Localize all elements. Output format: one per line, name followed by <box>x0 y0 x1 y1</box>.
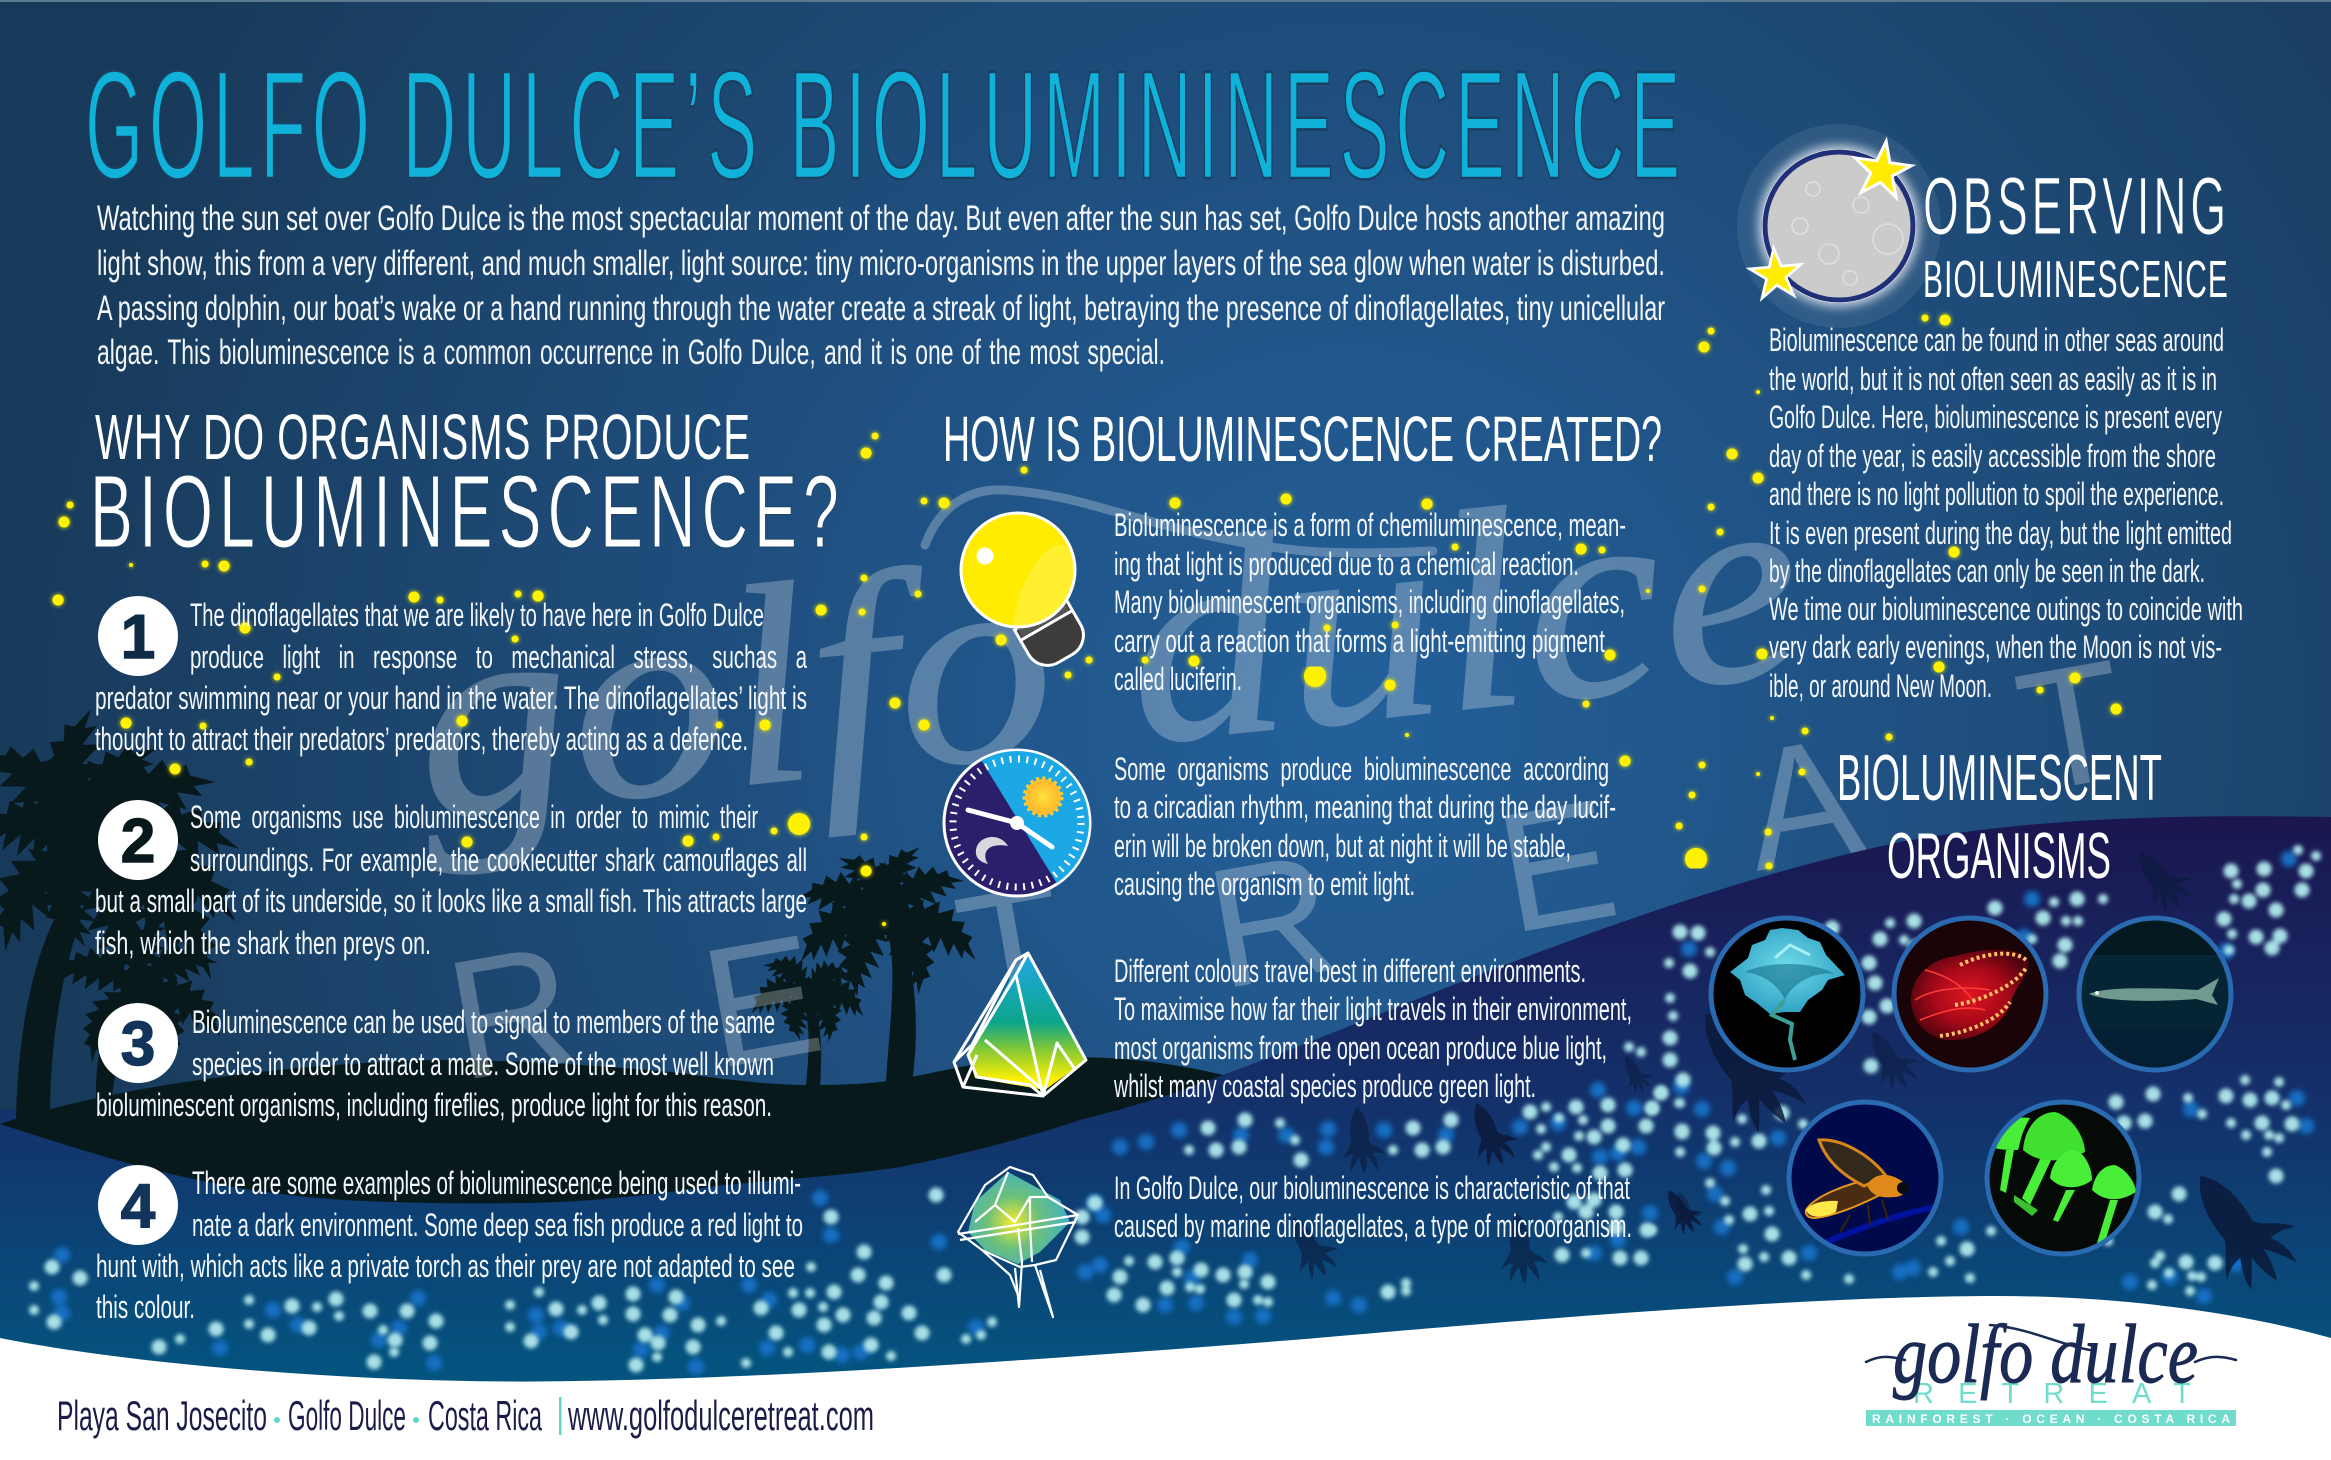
icon: clock day and night <box>942 748 1092 898</box>
first how paragraph: Bioluminescence is a form of chemiluminescence, mean- <box>1114 507 1626 543</box>
organism: firefly <box>1789 1102 1945 1255</box>
first how paragraph: carry out a reaction that forms a light-emitting pigment <box>1114 623 1605 659</box>
watermark: golfo dulce retreat: T <box>944 847 1080 1052</box>
reason 1: thought to attract their predators’ predators, thereby acting as a defence. <box>95 721 748 757</box>
organism: glowing mushrooms <box>1987 1102 2139 1254</box>
fireflies: normal <box>58 320 2116 871</box>
fourth how paragraph: In Golfo Dulce, our bioluminescence is characteristic of that <box>1114 1170 1630 1206</box>
logo: golfo dulce retreat: RAINFOREST · OCEAN · COSTA RICA <box>1872 1412 2230 1426</box>
reason 4: There are some examples of bioluminescence being used to illumi- <box>192 1165 801 1201</box>
reason 4: hunt with, which acts like a private torch as their prey are not adapted to see <box>96 1248 795 1284</box>
number badge 2: 2 <box>121 807 155 876</box>
number badge 4: 4 <box>121 1172 156 1241</box>
footer contact line: www.golfodulceretreat.com <box>567 1392 874 1439</box>
reason 1: predator swimming near or your hand in the water. The dinoflagellates’ light is <box>95 680 807 716</box>
bioluminescent water: blue bokeh <box>59 859 2306 1367</box>
reason 2: fish, which the shark then preys on. <box>95 925 431 961</box>
fireflies: tiny <box>131 392 1772 924</box>
second how paragraph <box>1114 751 1616 902</box>
third how paragraph: Different colours travel best in different environments. <box>1114 953 1586 989</box>
fourth how paragraph: caused by marine dinoflagellates, a type of microorganism. <box>1114 1208 1632 1244</box>
second how paragraph: Some organisms produce bioluminescence according <box>1114 751 1609 787</box>
fireflies: small <box>70 318 2040 866</box>
reason 2: but a small part of its underside, so it looks like a small fish. This attracts large <box>95 883 807 919</box>
watermark: golfo dulce retreat: T <box>2005 624 2140 829</box>
number badge 2 <box>98 800 178 880</box>
logo: golfo dulce retreat <box>1866 1308 2236 1426</box>
footer contact line: Playa San Josecito <box>57 1392 267 1439</box>
number badge 3 <box>98 1003 178 1083</box>
reason 2: Some organisms use bioluminescence in order to mimic their <box>190 799 758 835</box>
first how paragraph: called luciferin. <box>1114 661 1242 697</box>
second how paragraph: causing the organism to emit light. <box>1114 866 1415 902</box>
first how paragraph <box>1114 507 1626 697</box>
footer contact line <box>57 1392 874 1439</box>
intro paragraph <box>97 199 1665 372</box>
fourth how paragraph <box>1114 1170 1632 1244</box>
reason 1: The dinoflagellates that we are likely to have here in Golfo Dulce <box>190 597 764 633</box>
reason 4 <box>96 1165 803 1325</box>
logo: golfo dulce retreat: RETREAT <box>1913 1378 2191 1410</box>
second star <box>1748 246 1803 299</box>
white footer wave <box>0 1296 2331 1460</box>
reason 3 <box>96 1003 775 1123</box>
icon: light bulb <box>961 513 1091 673</box>
fireflies: large <box>799 676 1696 859</box>
second how paragraph: erin will be broken down, but at night it will be stable, <box>1114 828 1571 864</box>
observing paragraph: ible, or around New Moon. <box>1769 668 1992 704</box>
heading: how is bioluminescence created: HOW IS BIOLUMINESCENCE CREATED? <box>943 403 1662 475</box>
reason 3: Bioluminescence can be used to signal to members of the same <box>192 1004 775 1040</box>
icon: dinoflagellate <box>958 1167 1078 1317</box>
first how paragraph: Many bioluminescent organisms, including dinoflagellates, <box>1114 584 1625 620</box>
third how paragraph: most organisms from the open ocean produce blue light, <box>1114 1030 1607 1066</box>
watermark: golfo dulce retreat: R <box>435 909 589 1117</box>
squids in the water <box>1276 836 2314 1304</box>
reason 4: this colour. <box>96 1289 195 1325</box>
watermark: golfo dulce retreat: E <box>1485 763 1630 970</box>
star <box>1850 137 1914 199</box>
watermark: golfo dulce retreat: A <box>1730 700 1875 907</box>
heading: why do organisms produce bioluminescence <box>90 401 845 569</box>
island silhouette with palm trees <box>0 708 1223 1203</box>
heading: why do organisms produce bioluminescence: BIOLUMINESCENCE? <box>90 454 845 569</box>
watermark: golfo dulce retreat <box>428 485 2112 1078</box>
number badge 3: 3 <box>121 1010 155 1079</box>
reason 1 <box>95 596 807 757</box>
sea with glowing water <box>0 816 2331 1460</box>
crescent moon <box>976 837 1008 864</box>
reason 3: bioluminescent organisms, including fireflies, produce light for this reason. <box>96 1087 772 1123</box>
heading: bioluminescent organisms <box>1837 741 2162 892</box>
organism: blue jelly <box>1711 918 1863 1070</box>
reason 3: species in order to attract a mate. Some of the most well known <box>192 1046 774 1082</box>
watermark: golfo dulce retreat: E <box>690 898 834 1105</box>
icon: moon with stars <box>1737 124 1941 328</box>
heading: bioluminescent organisms: ORGANISMS <box>1887 819 2111 892</box>
footer contact line: Costa Rica <box>428 1392 542 1439</box>
reason 2: surroundings. For example, the cookiecutter shark camouflages all <box>190 842 807 878</box>
third how paragraph: whilst many coastal species produce green light. <box>1113 1068 1536 1104</box>
second how paragraph: to a circadian rhythm, meaning that during the day lucif- <box>1114 789 1616 825</box>
bioluminescent water: pale bokeh large <box>52 869 2306 1365</box>
third how paragraph: To maximise how far their light travels in their environment, <box>1114 991 1632 1027</box>
number badge 1: 1 <box>121 603 155 672</box>
observing paragraph <box>1769 322 2243 704</box>
reason 1: produce light in response to mechanical stress, suchas a <box>190 639 807 675</box>
watermark: golfo dulce retreat: R <box>1195 817 1349 1026</box>
number badge 4 <box>98 1165 178 1245</box>
third how paragraph <box>1113 953 1632 1104</box>
organism: red comb jelly <box>1894 918 2046 1070</box>
intro paragraph: algae. This bioluminescence is a common occurrence in Golfo Dulce, and it is one of the most special. <box>97 333 1165 372</box>
first how paragraph: ing that light is produced due to a chemical reaction. <box>1114 546 1579 582</box>
heading: observing bioluminescence <box>1923 161 2230 309</box>
sun <box>1025 779 1061 815</box>
watermark: golfo dulce retreat: golfo dulce <box>398 420 1814 880</box>
logo: golfo dulce retreat: golfo dulce <box>1893 1308 2198 1401</box>
bioluminescent water: pale bokeh small <box>34 850 2316 1363</box>
icon: coloured crystal pyramid <box>954 953 1086 1096</box>
footer contact line: Golfo Dulce <box>288 1392 406 1439</box>
organism: cookiecutter shark <box>2075 915 2235 1080</box>
heading: why do organisms produce bioluminescence: WHY DO ORGANISMS PRODUCE <box>95 401 751 473</box>
reason 4: nate a dark environment. Some deep sea fish produce a red light to <box>192 1207 803 1243</box>
number badge 1 <box>98 596 178 676</box>
reason 2 <box>95 799 807 961</box>
